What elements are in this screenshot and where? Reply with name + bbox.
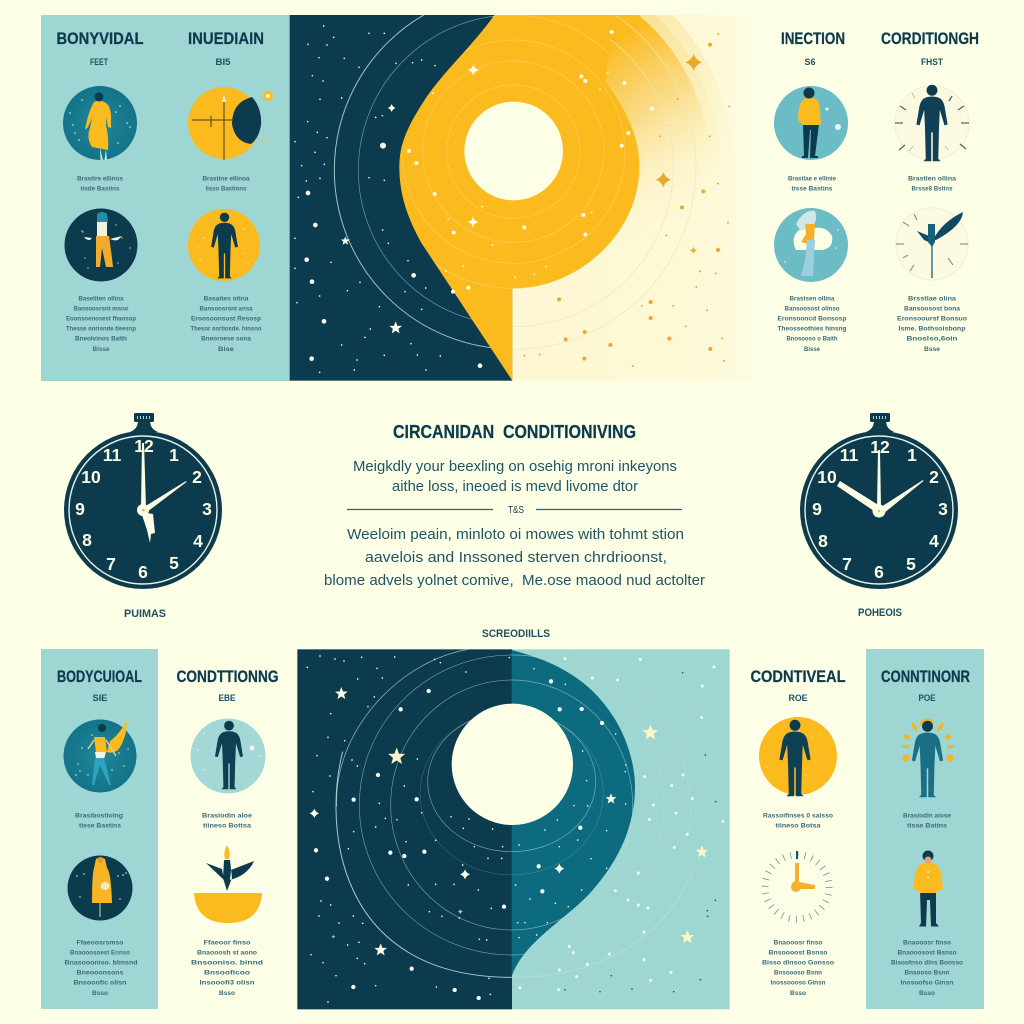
orbit rings <box>336 649 693 977</box>
clock: left stopwatch: 1 <box>169 445 179 465</box>
text: body column two lower: Bansoosrsnt ansa <box>200 306 253 312</box>
heading: bottom column two: CONDTTIONNG <box>176 667 278 686</box>
text: body bottom column one lower: Bnaooosoest Ennso <box>70 950 130 956</box>
text: body bottom column four lower: Bnaooosost Bsnso <box>898 950 957 956</box>
clock: right stopwatch: 7 <box>842 554 852 574</box>
icon: person in yellow sweater <box>913 850 943 926</box>
text: body bottom column three lower: Bnaooosr finso <box>774 940 823 946</box>
divider with label: T&S <box>508 505 524 516</box>
text: body right column one lower: Brastsen ollina <box>790 296 835 302</box>
text: caption right column two upper <box>908 176 956 192</box>
clock: right stopwatch: 9 <box>812 499 822 519</box>
text: caption bottom column one upper: tiese Bastins <box>79 822 121 830</box>
text: body column two lower: Thesor osrtiosde. hinsno <box>190 326 262 332</box>
clock: right stopwatch: 2 <box>929 467 939 487</box>
heading: right column one: INECTION <box>781 29 845 48</box>
sun stars <box>409 32 666 292</box>
text: body bottom column four lower: Bnaooosr finso <box>903 940 951 946</box>
stars <box>307 656 723 1002</box>
icon: clock with leaf hands <box>896 208 968 280</box>
text: caption bottom column one upper <box>75 812 123 830</box>
text: body column one lower: Bneolvinos Balth <box>75 336 127 342</box>
text: body column two lower: Basaites otina <box>204 296 249 302</box>
text: body bottom column three lower: Inossoooso Ginsn <box>770 980 826 986</box>
clock: right stopwatch: 1 <box>907 445 917 465</box>
clock: right stopwatch: 12 <box>870 437 890 457</box>
description text <box>324 527 705 589</box>
text: body right column one lower: Bansoosost olinso <box>784 306 840 312</box>
subheading: bottom column one: SIE <box>92 693 108 704</box>
text: caption bottom column three upper: Rassoifinses 0 saisso <box>763 812 833 820</box>
text: caption bottom column two upper: tiineso Bottsa <box>203 822 251 830</box>
text: body right column one lower: Bisse <box>804 346 820 353</box>
text: body bottom column three lower: Bnsoooost Bsnso <box>768 950 828 956</box>
icon: clock with navy person <box>895 85 969 161</box>
text: caption right column one upper <box>788 176 836 192</box>
subheading: bottom column four: POE <box>918 693 936 704</box>
icon: figure on dark circle <box>64 208 138 282</box>
icon: radial tick clock with orange hands <box>765 851 829 919</box>
text: body bottom column three lower: Bnsoooso Bsnn <box>774 970 822 976</box>
text: body bottom column one lower: Bnsooofic olisn <box>74 980 127 986</box>
label: schedule: SCREODIILLS <box>482 628 550 640</box>
text: body bottom column three lower <box>762 940 834 997</box>
text: body column one lower: Bisse <box>92 346 110 353</box>
icon: person in yellow shirt on teal circle <box>774 86 848 160</box>
clock: left stopwatch: 10 <box>81 467 101 487</box>
text: caption bottom column three upper <box>763 812 833 830</box>
text: caption right column two upper: Brastlen ollina <box>908 176 956 182</box>
text: body column two lower: Bise <box>218 346 234 353</box>
day sky background <box>512 15 755 381</box>
clock: left stopwatch: 5 <box>169 553 179 573</box>
gold stars on day side <box>524 34 729 366</box>
text: body right column one lower: Bnosooso o Baith <box>786 336 838 342</box>
clock: left stopwatch <box>64 413 222 589</box>
text: body bottom column one lower <box>64 940 138 997</box>
heading: left column one: BONYVIDAL <box>56 29 144 48</box>
clock: right stopwatch: 6 <box>874 562 884 582</box>
text: body right column one lower <box>778 296 847 353</box>
description text: Weeloim peain, minloto oi mowes with tohmt stion <box>347 527 684 543</box>
clock: right stopwatch: 5 <box>906 554 916 574</box>
description text: aavelois and Inssoned sterven chrdrioonst, <box>365 550 667 566</box>
text: caption bottom column four upper: Brasiodin aiose <box>903 812 951 820</box>
clock: left stopwatch: 3 <box>202 499 212 519</box>
text: body bottom column two lower: Ffaeoor finso <box>204 940 251 946</box>
text: body bottom column four lower: Bnsooso Bsnn <box>904 970 950 976</box>
clock: left stopwatch: 4 <box>193 531 203 551</box>
text: body column one lower: Bansoosrsnt msno <box>74 306 129 312</box>
icon: yellow figure on dark circle <box>68 856 132 920</box>
icon: woman in yellow dress on teal circle <box>63 86 137 160</box>
text: body bottom column three lower: Bsso <box>790 990 806 997</box>
text: body column one lower: Thesse onrionde tleesnp <box>66 326 136 332</box>
text: body bottom column four lower: Bsso <box>919 990 935 997</box>
subheading: left column one: FEET <box>90 57 108 68</box>
clock: right stopwatch: 4 <box>929 531 939 551</box>
orbit rings on night side <box>334 15 512 350</box>
clock: right stopwatch: 11 <box>840 445 859 465</box>
subheading: left column two: BI5 <box>216 57 231 68</box>
title: CIRCANIDAN CONDITIONIVING <box>393 422 636 442</box>
clock: left stopwatch: 7 <box>106 554 116 574</box>
clock: left stopwatch: 6 <box>138 562 148 582</box>
text: caption right column two upper: Brsse8 Bstins <box>912 186 953 192</box>
text: body right column two lower <box>897 296 967 353</box>
text: body column two lower: Bneoroese sona <box>201 336 251 342</box>
clock: right stopwatch: 8 <box>818 531 828 551</box>
label: right clock: POHEOIS <box>858 607 902 619</box>
icon: navy person on yellow circle <box>188 209 260 281</box>
yellow sun shape <box>399 15 639 381</box>
panel: bottom second column <box>176 667 278 997</box>
central sun disc <box>464 102 563 200</box>
text: caption column two upper <box>202 176 250 192</box>
clock: left stopwatch: 2 <box>192 467 202 487</box>
text: body bottom column two lower: Bsso <box>219 990 235 997</box>
subheading: bottom column three: ROE <box>788 693 808 704</box>
panel: bottom night sky with moon <box>297 649 730 1009</box>
text: body right column one lower: Eronsooncd Bonsosp <box>778 316 847 322</box>
panel: top day and night split with sun <box>290 0 755 387</box>
text: body bottom column two lower <box>191 940 263 997</box>
text: caption right column one upper: Brastlae e ellinie <box>788 176 836 182</box>
text: body right column two lower: Bsse <box>924 346 940 353</box>
subheading: right column two: FHST <box>921 57 943 68</box>
icon: navy person on yellow circle <box>759 717 837 796</box>
subheading: right column one: S6 <box>804 57 816 68</box>
clock: left stopwatch: 11 <box>103 445 122 465</box>
icon: person with cape on teal circle <box>64 720 136 792</box>
text: body right column two lower: Bansoosost bona <box>904 306 960 312</box>
text: body bottom column three lower: Bisso dlnsoo Gonsso <box>762 960 834 966</box>
moon disc <box>452 704 573 825</box>
sun glow bands <box>512 15 728 350</box>
clock: right stopwatch: 10 <box>817 467 837 487</box>
label: left clock: PUIMAS <box>124 608 166 620</box>
intro text: aithe loss, ineoed is mevd livome dtor <box>392 479 638 495</box>
text: body column two lower <box>190 296 262 353</box>
text: caption bottom column three upper: tiineso Botsa <box>776 822 821 830</box>
text: body bottom column one lower: Ffaeoosrsmso <box>76 940 124 946</box>
sun orbit rings <box>401 15 626 289</box>
clock: left stopwatch: 9 <box>75 499 85 519</box>
icon: yellow circle with crescent and crosshair <box>188 87 273 160</box>
text: body bottom column one lower: Bneooonsons <box>76 970 124 976</box>
text block: central title and description <box>324 422 705 589</box>
panel: bottom left column on teal <box>41 649 158 1009</box>
description text: blome advels yolnet comive, Me.ose maood nud actolter <box>324 573 705 589</box>
text: body column one lower: Eoonsoenosest fhansop <box>66 316 136 322</box>
clock: left stopwatch: 12 <box>134 436 154 456</box>
icon: navy bird over yellow bowl <box>194 845 262 923</box>
text: body bottom column one lower: Bnasoooniso. blmsnd <box>64 960 138 966</box>
panel: bottom right fourth column <box>750 667 846 997</box>
heading: bottom column one: BODYCUIOAL <box>57 667 142 686</box>
panel: bottom right teal column <box>866 649 984 1009</box>
text: caption bottom column two upper: Brasiodin aloe <box>202 812 252 820</box>
text: body bottom column two lower: Bnsooficoo <box>204 970 250 976</box>
text: body right column two lower: Isme. Bothsoisbonp <box>898 326 966 332</box>
icon: navy person on light teal circle <box>190 718 266 794</box>
subheading: bottom column two: EBE <box>218 693 236 704</box>
text: body right column two lower: Eronsooursf Bonsuo <box>897 316 967 322</box>
intro text: Meigkdly your beexling on osehig mroni inkeyons <box>353 459 677 475</box>
text: body bottom column two lower: Insooofi3 olisn <box>200 980 255 986</box>
text: caption column one upper <box>77 176 123 192</box>
text: body bottom column two lower: Bnaooosh st aono <box>197 950 257 956</box>
night sky background <box>290 15 512 381</box>
medium teal curved shape <box>512 650 635 977</box>
text: caption bottom column one upper: Brasibostlolng <box>75 812 123 820</box>
text: body bottom column four lower <box>891 940 963 997</box>
heading: bottom column three: CODNTIVEAL <box>750 667 846 686</box>
text: body bottom column two lower: Bnsooniso. binnd <box>191 960 263 966</box>
icon: teal person with yellow rays <box>902 718 954 797</box>
panel: top left teal columns <box>41 15 290 381</box>
text: body column one lower: Baseliten ollina <box>78 296 124 302</box>
text: caption bottom column four upper <box>903 812 951 830</box>
text: caption column two upper: lisso Bastions <box>206 186 247 192</box>
heading: bottom column four: CONNTINONR <box>881 667 970 686</box>
light teal right half <box>512 649 730 1009</box>
night stars <box>295 26 480 372</box>
heading: right column two: CORDITIONGH <box>881 29 979 48</box>
panel: top right columns <box>774 29 979 353</box>
dark left half <box>297 649 512 1009</box>
text: body column one lower <box>66 296 136 353</box>
text: body bottom column four lower: Bisoofnso dlns Bonsso <box>891 960 963 966</box>
clock: left stopwatch: 8 <box>82 530 92 550</box>
heading: left column two: INUEDIAIN <box>188 29 264 48</box>
icon: pale figure with cloud on teal circle <box>774 208 848 282</box>
text: caption column one upper: tisde Bastins <box>80 186 120 192</box>
text: body right column two lower: Brsstlae olina <box>908 296 956 302</box>
text: body column two lower: Eroosoonsust Resosp <box>191 316 261 322</box>
clock: right stopwatch <box>800 413 958 589</box>
text: body bottom column one lower: Bsso <box>92 990 108 997</box>
text: caption column one upper: Brastire ellinos <box>77 176 123 182</box>
intro text <box>353 459 677 495</box>
text: body right column two lower: Bnoslso,6oin <box>906 336 958 342</box>
text: caption column two upper: Brastine ellinoa <box>202 176 250 182</box>
clock: right stopwatch: 3 <box>938 499 948 519</box>
text: caption bottom column four upper: tisse Batins <box>907 822 947 830</box>
text: caption right column one upper: tisse Bastins <box>792 186 833 192</box>
text: caption bottom column two upper <box>202 812 252 830</box>
text: body bottom column four lower: Inosoofso Ginsn <box>900 980 954 986</box>
text: body right column one lower: Theosseothies hinsng <box>778 326 847 332</box>
